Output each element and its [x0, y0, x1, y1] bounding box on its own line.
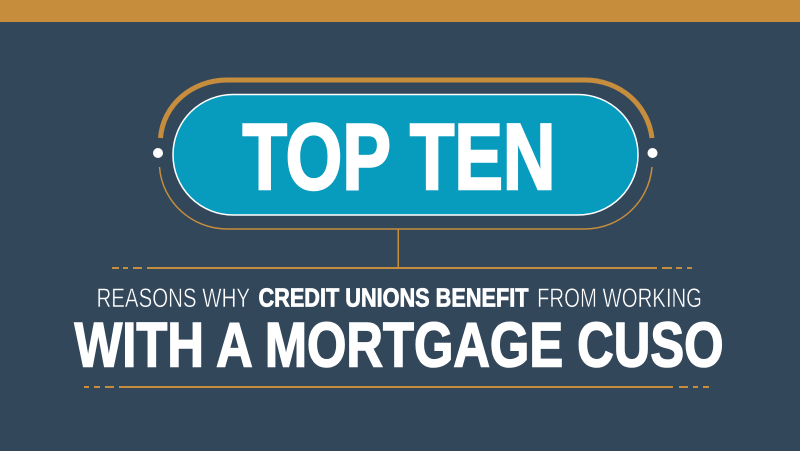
- left ring dot: [153, 148, 163, 158]
- lower divider with dashes: [84, 386, 709, 388]
- top accent bar: [0, 0, 800, 22]
- teal title pill: [173, 94, 638, 215]
- subtitle light start: REASONS WHY: [96, 283, 250, 313]
- subtitle bold middle: CREDIT UNIONS BENEFIT: [258, 285, 529, 313]
- right ring dot: [648, 148, 658, 158]
- thick upper ring arc: [160, 80, 652, 138]
- upper divider with dashes: [112, 267, 692, 269]
- connector line: [398, 229, 399, 268]
- thin lower ring arc: [160, 167, 652, 229]
- subtitle line: [96, 283, 702, 313]
- subtitle light end: FROM WORKING: [537, 283, 702, 313]
- heading: top ten: TOP TEN: [242, 104, 556, 209]
